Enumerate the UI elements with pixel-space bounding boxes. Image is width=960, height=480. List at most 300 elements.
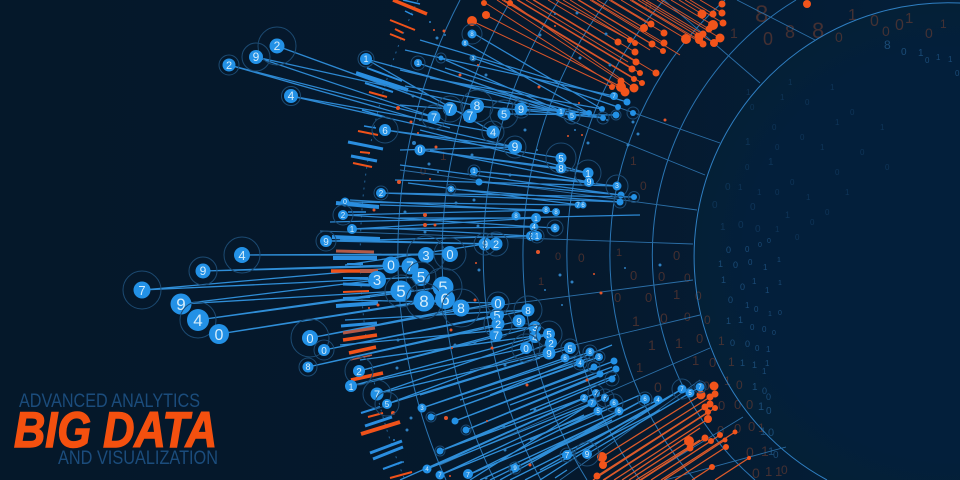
node 2 (545, 337, 557, 350)
blue bars (332, 0, 420, 469)
node 6 (461, 425, 471, 435)
node 4: 4 (288, 89, 295, 103)
node 5 (536, 321, 562, 347)
node 8: 8 (457, 300, 465, 316)
node 5: 5 (438, 278, 448, 297)
binary digits: faint field inside void: 0 (860, 148, 865, 157)
node 1 (468, 165, 480, 177)
binary digits: dim orange ring band (420, 0, 947, 480)
binary digits: dim orange ring band: 1 (616, 247, 622, 259)
binary digits: faint field inside void: 0 (755, 224, 761, 235)
node 7 (574, 202, 582, 209)
binary digits: dim blue in the void: 0 (745, 245, 750, 254)
node 0 (314, 340, 334, 360)
node 4 (573, 356, 587, 370)
node 1: 1 (534, 216, 538, 223)
binary digits: dim orange ring band: 0 (695, 289, 702, 303)
node 7: 7 (431, 112, 437, 124)
binary digits: dim orange ring band: 0 (660, 310, 668, 326)
node 5: 5 (493, 308, 501, 323)
binary digits: faint field inside void: 0 (712, 200, 718, 211)
node 2 (610, 358, 618, 364)
binary digits: dim orange ring band: 0 (645, 290, 652, 305)
node 7 (463, 109, 477, 123)
node 9: 9 (546, 349, 552, 360)
node 4 (224, 237, 260, 273)
binary digits: dim blue in the void: 0 (726, 245, 731, 255)
binary digits: dim blue in the void: 0 (772, 330, 776, 337)
node 5: 5 (546, 330, 552, 341)
node 2 (526, 231, 536, 241)
node 0: 0 (306, 331, 314, 346)
node 9: 9 (585, 450, 590, 459)
node 1: 1 (363, 54, 369, 64)
node 7: 7 (138, 283, 146, 298)
node 6 (372, 117, 398, 143)
orange node cluster, top (467, 0, 811, 96)
binary digits: faint field inside void: 1 (820, 143, 825, 152)
binary digits: dim blue in the void: 0 (901, 47, 907, 58)
binary digits: faint field inside void: 1 (845, 188, 850, 197)
node 6 (614, 406, 624, 416)
node 5 (490, 100, 518, 128)
node 5: 5 (567, 344, 573, 354)
node 7 (123, 271, 161, 309)
node 7 (672, 379, 692, 399)
node 1 (347, 224, 357, 234)
node 6 (596, 389, 614, 407)
node 1 (358, 51, 374, 67)
binary digits: dim blue in the void: 1 (777, 257, 781, 264)
node 8: 8 (305, 362, 311, 372)
binary digits: dim blue in the void: 0 (955, 69, 960, 78)
node 8 (514, 296, 542, 324)
binary digits: dim blue in the void: 1 (752, 360, 757, 370)
binary digits: faint field inside void: 1 (880, 123, 885, 132)
node 7: 7 (565, 451, 570, 460)
blue nodes: lower fan starts (418, 404, 599, 480)
node 1: 1 (472, 169, 476, 175)
node 1 (624, 98, 630, 106)
node 5 (546, 143, 576, 173)
binary digits: dim orange ring band: 0 (673, 248, 680, 263)
node 8 (542, 206, 550, 214)
blue nodes: mid arc cluster (484, 292, 706, 416)
node 0 (414, 144, 426, 156)
node 7 (588, 398, 596, 408)
node 6: 6 (563, 356, 567, 362)
binary digits: dim orange ring band: 1 (636, 360, 643, 375)
binary digits: faint field inside void: 1 (746, 88, 751, 97)
node 0: 0 (321, 346, 327, 357)
node 6 (580, 202, 586, 209)
node 6: 6 (643, 397, 647, 403)
binary digits: dim blue in the void (718, 38, 960, 461)
node 5: 5 (570, 113, 574, 120)
binary digits: dim orange ring band: 0 (704, 313, 711, 327)
binary digits: dim orange ring band: 0 (734, 421, 741, 436)
binary digits: faint field inside void: 1 (775, 225, 780, 234)
binary digits: faint field inside void: 0 (835, 168, 840, 177)
node 0 (209, 324, 229, 344)
binary digits: dim orange ring band: 0 (736, 378, 743, 392)
node 8 (605, 372, 619, 386)
binary digits: dim orange ring band: 1 (848, 7, 857, 24)
binary digits: dim blue in the void: 1 (752, 382, 758, 393)
node 0: 0 (417, 145, 423, 155)
node 3: 3 (472, 56, 475, 62)
node 8 (614, 196, 626, 208)
node 7 (436, 470, 444, 480)
node 8 (299, 358, 317, 376)
node 2: 2 (226, 60, 232, 72)
node 4 (523, 325, 547, 349)
binary digits: dim blue in the void: 0 (766, 406, 772, 417)
binary digits: dim orange ring band: 1 (718, 334, 725, 348)
node 2: 2 (493, 239, 499, 251)
node 1 (345, 380, 357, 392)
binary digits: faint field inside void: 1 (738, 183, 743, 192)
binary digits: dim orange ring band: 1 (538, 276, 544, 288)
binary digits: dim orange ring band: 0 (684, 271, 691, 285)
node 2: 2 (582, 396, 586, 402)
binary digits: dim orange ring band: 1 (440, 149, 447, 163)
node 2: 2 (594, 391, 598, 397)
node 6: 6 (440, 290, 450, 309)
binary digits: dim blue in the void: 1 (726, 316, 731, 326)
binary digits: faint field inside void: 1 (780, 93, 785, 102)
binary digits: dim blue in the void: 1 (740, 358, 745, 368)
node 9 (504, 136, 526, 158)
node 7: 7 (467, 109, 474, 123)
binary digits: dim blue in the void: 0 (750, 323, 755, 332)
node 5: 5 (688, 391, 692, 397)
node 8: 8 (464, 41, 467, 47)
node 8 (556, 162, 566, 175)
eyebrow: advanced analytics: ADVANCED ANALYTICS (19, 390, 200, 412)
binary digits: dim orange ring band: 1 (632, 313, 640, 329)
node 9: 9 (586, 177, 592, 187)
node 8: 8 (514, 214, 518, 220)
binary digits: dim blue in the void: 0 (762, 386, 767, 396)
node 3: 3 (420, 406, 424, 412)
blue connector lines, upper fan (229, 33, 640, 244)
node 3 (627, 107, 639, 119)
binary digits: dim blue in the void: 1 (760, 426, 766, 438)
binary digits: dim blue in the void: 1 (763, 263, 768, 272)
binary digits: dim blue in the void: 1 (778, 280, 782, 287)
binary digits: dim orange ring band: 1 (905, 10, 913, 27)
node 5 (564, 108, 580, 124)
binary digits: dim blue in the void: 1 (766, 345, 771, 354)
binary digits: dim orange ring band: 1 (728, 355, 735, 369)
node 0 (596, 370, 604, 378)
node 1 (588, 361, 600, 373)
binary digits: dim blue in the void: 1 (768, 446, 774, 458)
binary digits: dim blue in the void: 0 (766, 392, 771, 402)
node 6: 6 (612, 401, 616, 407)
node 4 (530, 222, 538, 232)
node 7: 7 (374, 389, 380, 401)
binary digits: dim blue in the void: 0 (925, 56, 930, 65)
node 2: 2 (548, 339, 554, 350)
binary digits: faint field inside void: 1 (806, 193, 811, 202)
node 1 (575, 160, 601, 186)
node 9: 9 (253, 50, 260, 64)
node 0: 0 (215, 327, 224, 344)
node 3 (418, 404, 426, 412)
node 8 (615, 104, 621, 110)
orange data lines, bottom (593, 395, 749, 480)
node 1 (530, 229, 544, 243)
binary digits: dim orange ring band: 0 (717, 423, 724, 438)
node 0 (628, 192, 640, 202)
node 8: 8 (554, 210, 558, 216)
node 7 (610, 92, 618, 100)
node 9: 9 (512, 140, 519, 154)
binary digits: dim blue in the void: 0 (758, 242, 762, 249)
node 4: 4 (532, 333, 538, 344)
binary digits: dim orange ring band: 0 (882, 23, 890, 39)
binary digits: dim blue in the void: 0 (733, 260, 738, 270)
binary digits: dim orange ring band: 0 (578, 251, 585, 265)
binary digits: dim blue in the void: 1 (745, 301, 750, 310)
binary digits: dim orange ring band: 0 (895, 17, 904, 34)
node 6: 6 (581, 203, 585, 209)
binary digits: dim blue in the void: 1 (948, 55, 953, 64)
binary digits: dim blue in the void: 8 (884, 38, 891, 52)
node 2 (374, 186, 388, 200)
node 0: 0 (494, 296, 502, 311)
node 4 (422, 464, 432, 474)
binary digits: dim orange ring band: 0 (696, 331, 703, 346)
node 4: 4 (193, 311, 203, 330)
blue nodes: central large cluster (368, 232, 508, 327)
node 0: 0 (450, 187, 453, 193)
node 5: 5 (596, 409, 600, 415)
node 3 (529, 321, 541, 334)
node 9: 9 (323, 237, 329, 248)
node 6 (605, 394, 623, 412)
binary digits: faint field inside void: 1 (785, 210, 790, 220)
node 6 (586, 110, 592, 116)
node 7 (463, 469, 473, 479)
radial bar glyphs along the outer edge (331, 0, 427, 478)
binary digits: faint field inside void: 0 (745, 163, 750, 172)
binary digits: faint field inside void: 0 (810, 218, 815, 227)
node 8 (462, 40, 468, 47)
node 1 (411, 56, 425, 70)
node 0: 0 (446, 247, 454, 262)
binary digits: dim orange ring band: 1 (692, 353, 699, 368)
node 3: 3 (615, 183, 619, 190)
node 7: 7 (447, 102, 454, 116)
binary digits: faint field inside void: 0 (738, 220, 744, 231)
orange bars (331, 0, 427, 478)
node 2 (580, 394, 588, 402)
node 3 (612, 366, 620, 372)
binary digits: dim orange ring band: 0 (870, 13, 879, 30)
node 7: 7 (590, 401, 594, 407)
node 4: 4 (425, 467, 429, 473)
node 3: 3 (422, 248, 430, 263)
node 5: 5 (558, 154, 564, 165)
node 8 (599, 106, 605, 112)
node 4 (452, 418, 458, 424)
subtitle: and visualization: AND VISUALIZATION (58, 447, 218, 469)
blue connector lines, centre and lower fan (142, 240, 700, 480)
binary digits: dim orange ring band: 0 (763, 29, 773, 49)
binary digits: dim orange ring band: 1 (775, 464, 782, 479)
binary digits: dim orange ring band: 1 (940, 17, 947, 31)
node 7 (422, 105, 446, 129)
node 5: 5 (501, 109, 507, 121)
binary digits: dim blue in the void: 0 (748, 258, 753, 267)
binary digits: faint field inside void: 0 (790, 178, 795, 187)
node 4: 4 (238, 248, 246, 263)
binary digits: dim orange ring band: 0 (718, 398, 725, 413)
binary digits: dim orange ring band: 0 (703, 379, 710, 393)
node 9: 9 (482, 239, 488, 251)
node 0: 0 (387, 257, 395, 273)
node 3 (470, 54, 476, 62)
node 8: 8 (525, 306, 531, 317)
binary digits: faint field inside void: 1 (720, 222, 726, 233)
binary digits: faint field inside void: 0 (850, 108, 855, 117)
binary digits: dim blue in the void: 0 (773, 450, 779, 461)
orange data lines, top (472, 0, 723, 92)
node 6 (547, 220, 563, 236)
binary digits: dim orange ring band: 1 (648, 337, 656, 353)
binary digits: faint field inside void: 1 (788, 78, 793, 87)
node 1 (531, 213, 541, 223)
node 6: 6 (603, 396, 607, 402)
binary digits: dim orange ring band: 0 (420, 166, 426, 178)
node 4: 4 (578, 361, 582, 367)
node 7 (490, 328, 502, 342)
binary digits: dim blue in the void: 0 (767, 238, 771, 245)
node 3: 3 (532, 323, 538, 334)
binary digits: dim blue in the void: 1 (765, 359, 770, 368)
node 2 (345, 357, 373, 385)
binary digits: dim orange ring band: 1 (761, 443, 769, 459)
binary digits: faint field inside void: 0 (805, 98, 810, 107)
binary digits: dim blue in the void: 1 (718, 259, 723, 269)
node 9: 9 (516, 317, 522, 328)
binary digits: faint field inside void (712, 78, 890, 242)
node 8 (583, 345, 597, 359)
node 1: 1 (585, 169, 591, 180)
binary digits: dim orange ring band: 0 (925, 25, 933, 41)
node 2 (484, 310, 512, 338)
node 2: 2 (529, 232, 534, 241)
node 7 (694, 381, 706, 393)
binary digits: faint field inside void: 1 (757, 188, 762, 197)
node 8: 8 (558, 164, 564, 175)
node 0: 0 (523, 344, 529, 355)
muted bars (336, 251, 378, 360)
node 4 (282, 86, 300, 106)
inner circular void (694, 3, 960, 480)
binary digits: faint field inside void: 1 (835, 118, 840, 127)
binary digits: dim orange ring band: 1 (673, 287, 680, 302)
node 8: 8 (474, 99, 481, 113)
binary digits: dim orange ring band: 1 (724, 374, 731, 388)
blue nodes: outer left upper (219, 24, 530, 220)
node 7: 7 (493, 330, 499, 342)
node 4: 4 (532, 224, 536, 231)
binary digits: dim orange ring band: 0 (835, 29, 843, 45)
binary digits: dim orange ring band: 8 (785, 22, 795, 42)
binary digits: dim blue in the void: 1 (758, 401, 764, 413)
binary digits: faint field inside void: 0 (825, 208, 830, 217)
binary digits: dim orange ring band: 1 (675, 335, 683, 351)
node 4: 4 (490, 127, 496, 139)
node 6 (638, 392, 652, 406)
binary digits: faint field inside void: 0 (775, 143, 780, 152)
node 9 (584, 177, 594, 187)
binary digits: faint field inside void: 1 (768, 157, 774, 168)
node 3 (593, 351, 605, 363)
node 8: 8 (544, 208, 548, 214)
binary digits: dim blue in the void: 0 (730, 338, 735, 348)
node 0 (512, 334, 540, 362)
node 5: 5 (396, 282, 406, 301)
node 6: 6 (382, 126, 388, 137)
binary digits: faint field inside void: 0 (725, 182, 731, 193)
node 3: 3 (597, 355, 601, 361)
node 1: 1 (348, 382, 354, 392)
binary digits: dim blue in the void: 0 (740, 282, 745, 292)
binary digits: dim orange ring band: 0 (555, 251, 561, 263)
node 7: 7 (576, 203, 580, 209)
node 9 (242, 43, 270, 71)
binary digits: dim orange ring band: 0 (748, 419, 755, 434)
binary digits: dim orange ring band: 1 (765, 464, 772, 479)
binary digits: dim blue in the void: 0 (768, 427, 774, 439)
binary digits: dim blue in the void: 0 (745, 339, 750, 349)
node 8 (462, 24, 482, 44)
blue nodes: far left column (123, 198, 399, 416)
binary digits: faint field inside void: 0 (750, 202, 756, 213)
node 0 (340, 198, 350, 206)
binary digits: dim blue in the void: 1 (768, 311, 772, 318)
node 9: 9 (200, 264, 207, 278)
binary digits: dim orange ring band: 0 (614, 290, 621, 305)
binary digits: dim blue in the void: 1 (721, 275, 726, 285)
node 5 (594, 406, 602, 416)
node 9 (575, 442, 599, 466)
binary digits: dim orange ring band: 0 (658, 269, 665, 284)
binary digits: faint field inside void: 1 (830, 83, 835, 92)
node 5 (375, 392, 399, 416)
node 5 (490, 308, 504, 323)
node 3 (606, 175, 628, 197)
node 9 (170, 294, 192, 314)
binary digits: faint field inside void: 0 (795, 233, 800, 242)
node 2: 2 (356, 367, 362, 378)
binary digits: dim orange ring band: 1 (630, 154, 637, 168)
node 0 (291, 319, 329, 357)
binary digits: dim blue in the void: 1 (738, 315, 743, 325)
node 9 (426, 412, 436, 422)
binary digits: faint field inside void: 0 (775, 188, 780, 197)
node 9: 9 (518, 104, 524, 116)
scattered data dots (393, 12, 662, 480)
binary digits: dim orange ring band: 0 (709, 355, 716, 370)
binary digits: dim blue in the void: 1 (752, 277, 757, 286)
binary digits: dim blue in the void: 0 (754, 305, 759, 314)
